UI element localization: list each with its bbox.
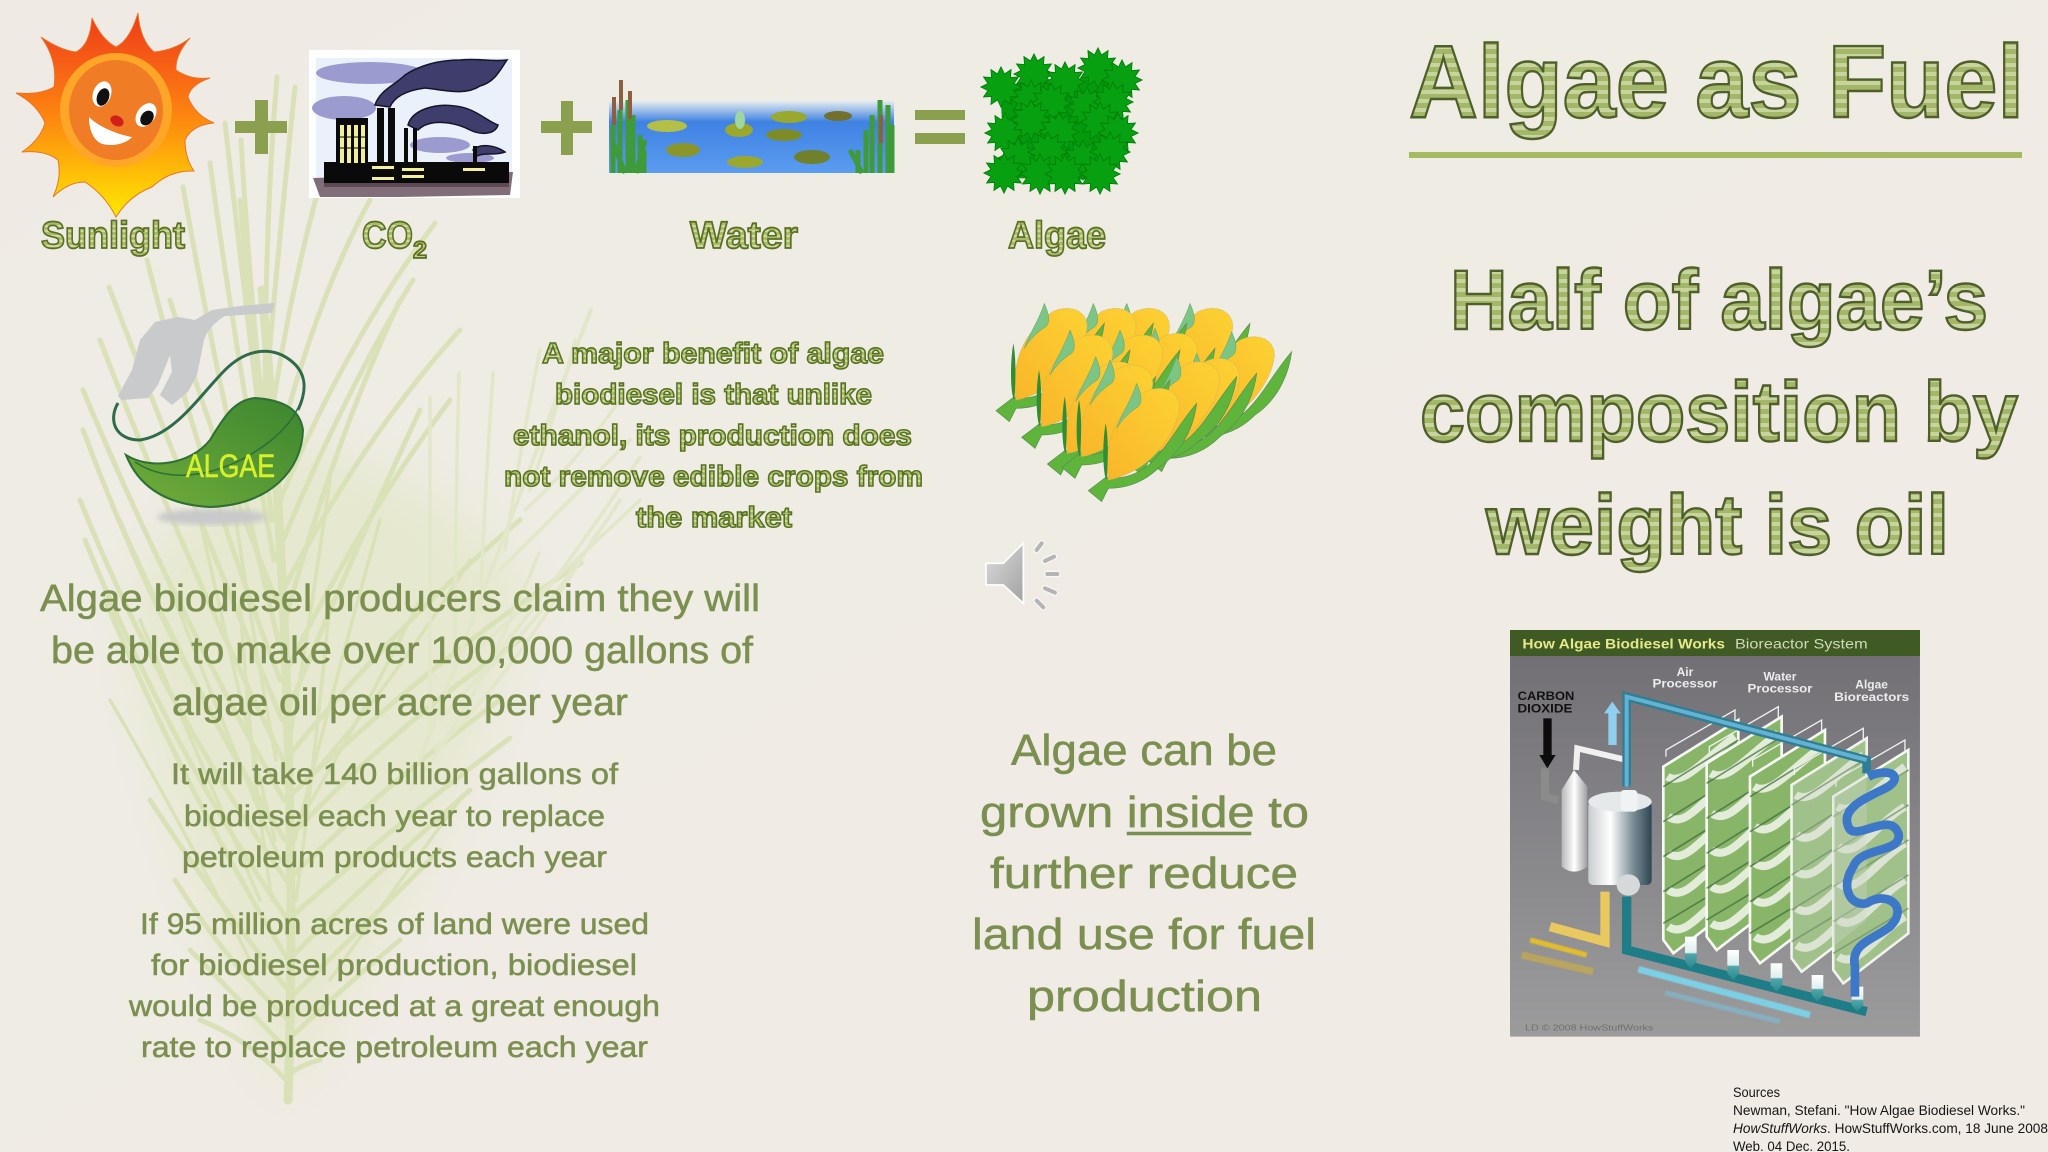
text: 95 million acres: rate to replace petroleum each year	[141, 1031, 648, 1064]
sources	[1733, 1085, 2048, 1152]
sources: Newman, Stefani. "How Algae Biodiesel Works."	[1733, 1103, 2025, 1118]
text: major benefit	[504, 338, 923, 534]
bioreactor panels	[1663, 707, 1908, 983]
diagram header: Bioreactor System	[1735, 635, 1868, 651]
output stripes	[1522, 940, 1810, 1022]
title underline	[1409, 152, 2022, 158]
diagram labels: Processor	[1747, 682, 1813, 696]
icon: fuel pump nozzle and algae leaf: ALGAE	[186, 448, 275, 484]
label: Water: Water	[690, 215, 798, 257]
diagram labels: Processor	[1652, 677, 1718, 691]
diagram labels: Water	[1764, 670, 1797, 684]
palm frond watermark	[80, 77, 640, 1100]
text: 95 million acres	[128, 908, 660, 1064]
heading: half of algae's composition: composition by	[1420, 365, 2018, 459]
label: CO2: CO	[362, 215, 413, 257]
text: producers claim: be able to make over 100,000 gallons of	[51, 630, 753, 672]
icon: factory with smoke	[309, 50, 520, 198]
blue flow line	[1847, 773, 1899, 997]
icon: speaker	[986, 543, 1057, 607]
text: producers claim	[40, 578, 760, 724]
text: major benefit: the market	[636, 502, 792, 534]
heading: half of algae's composition: Half of algae’s	[1450, 253, 1988, 347]
icon: fuel pump nozzle and algae leaf	[114, 303, 304, 525]
text: 140 billion gallons: biodiesel each year to replace	[184, 800, 605, 833]
diagram labels: Air	[1677, 665, 1694, 679]
icon: plus sign 1	[235, 100, 287, 154]
carbon dioxide arrow	[1539, 718, 1556, 768]
pipes and tanks	[1545, 697, 1867, 1012]
diagram labels: CARBON	[1518, 689, 1574, 703]
text: producers claim: algae oil per acre per year	[172, 682, 628, 724]
icon: lily pond	[609, 80, 894, 173]
text: grown inside: grown inside to	[980, 788, 1309, 837]
sources: HowStuffWorks. HowStuffWorks.com, 18 June 2008	[1733, 1121, 2048, 1136]
diagram labels: DIOXIDE	[1517, 702, 1572, 716]
text: grown inside: production	[1027, 972, 1262, 1021]
algae drain tubes	[1685, 937, 1863, 1012]
icon: plus sign 2	[541, 101, 592, 155]
icon: corn cobs	[996, 303, 1292, 502]
icon: algae cluster	[981, 48, 1142, 194]
text: 140 billion gallons	[171, 758, 619, 874]
text: grown inside	[972, 726, 1316, 1021]
text: major benefit: biodiesel is that unlike	[555, 379, 872, 411]
diagram labels: Bioreactors	[1834, 690, 1909, 704]
text: major benefit: not remove edible crops from	[504, 461, 923, 493]
diagram labels	[1517, 665, 1909, 716]
diagram: bioreactor system: LD © 2008 HowStuffWorks	[1525, 1023, 1654, 1033]
text: grown inside: land use for fuel	[972, 910, 1316, 959]
heading: half of algae's composition	[1420, 253, 2018, 572]
heading: half of algae's composition: weight is oil	[1485, 478, 1949, 572]
text: 140 billion gallons: It will take 140 billion gallons of	[171, 758, 619, 791]
text: producers claim: Algae biodiesel producers claim they will	[40, 578, 760, 620]
text: major benefit: ethanol, its production does	[513, 420, 912, 452]
icon: smiling sun	[16, 13, 214, 217]
diagram header: How Algae Biodiesel Works	[1522, 635, 1725, 651]
text: major benefit: A major benefit of algae	[542, 338, 884, 370]
diagram labels: Algae	[1855, 677, 1888, 691]
sources: Sources	[1733, 1085, 1780, 1100]
text: 140 billion gallons: petroleum products each year	[182, 841, 607, 874]
text: grown inside: further reduce	[990, 849, 1298, 898]
text: 95 million acres: would be produced at a great enough	[128, 990, 660, 1023]
text: grown inside: Algae can be	[1011, 726, 1277, 775]
icon: equals sign	[915, 110, 965, 144]
label: CO2: 2	[413, 237, 427, 264]
label: Algae: Algae	[1008, 215, 1106, 257]
label: Sunlight: Sunlight	[41, 215, 185, 257]
text: 95 million acres: for biodiesel production, biodiesel	[151, 949, 637, 982]
diagram: bioreactor system	[1510, 630, 1920, 1037]
diagram header	[1510, 630, 1920, 656]
text: 95 million acres: If 95 million acres of land were used	[140, 908, 649, 941]
